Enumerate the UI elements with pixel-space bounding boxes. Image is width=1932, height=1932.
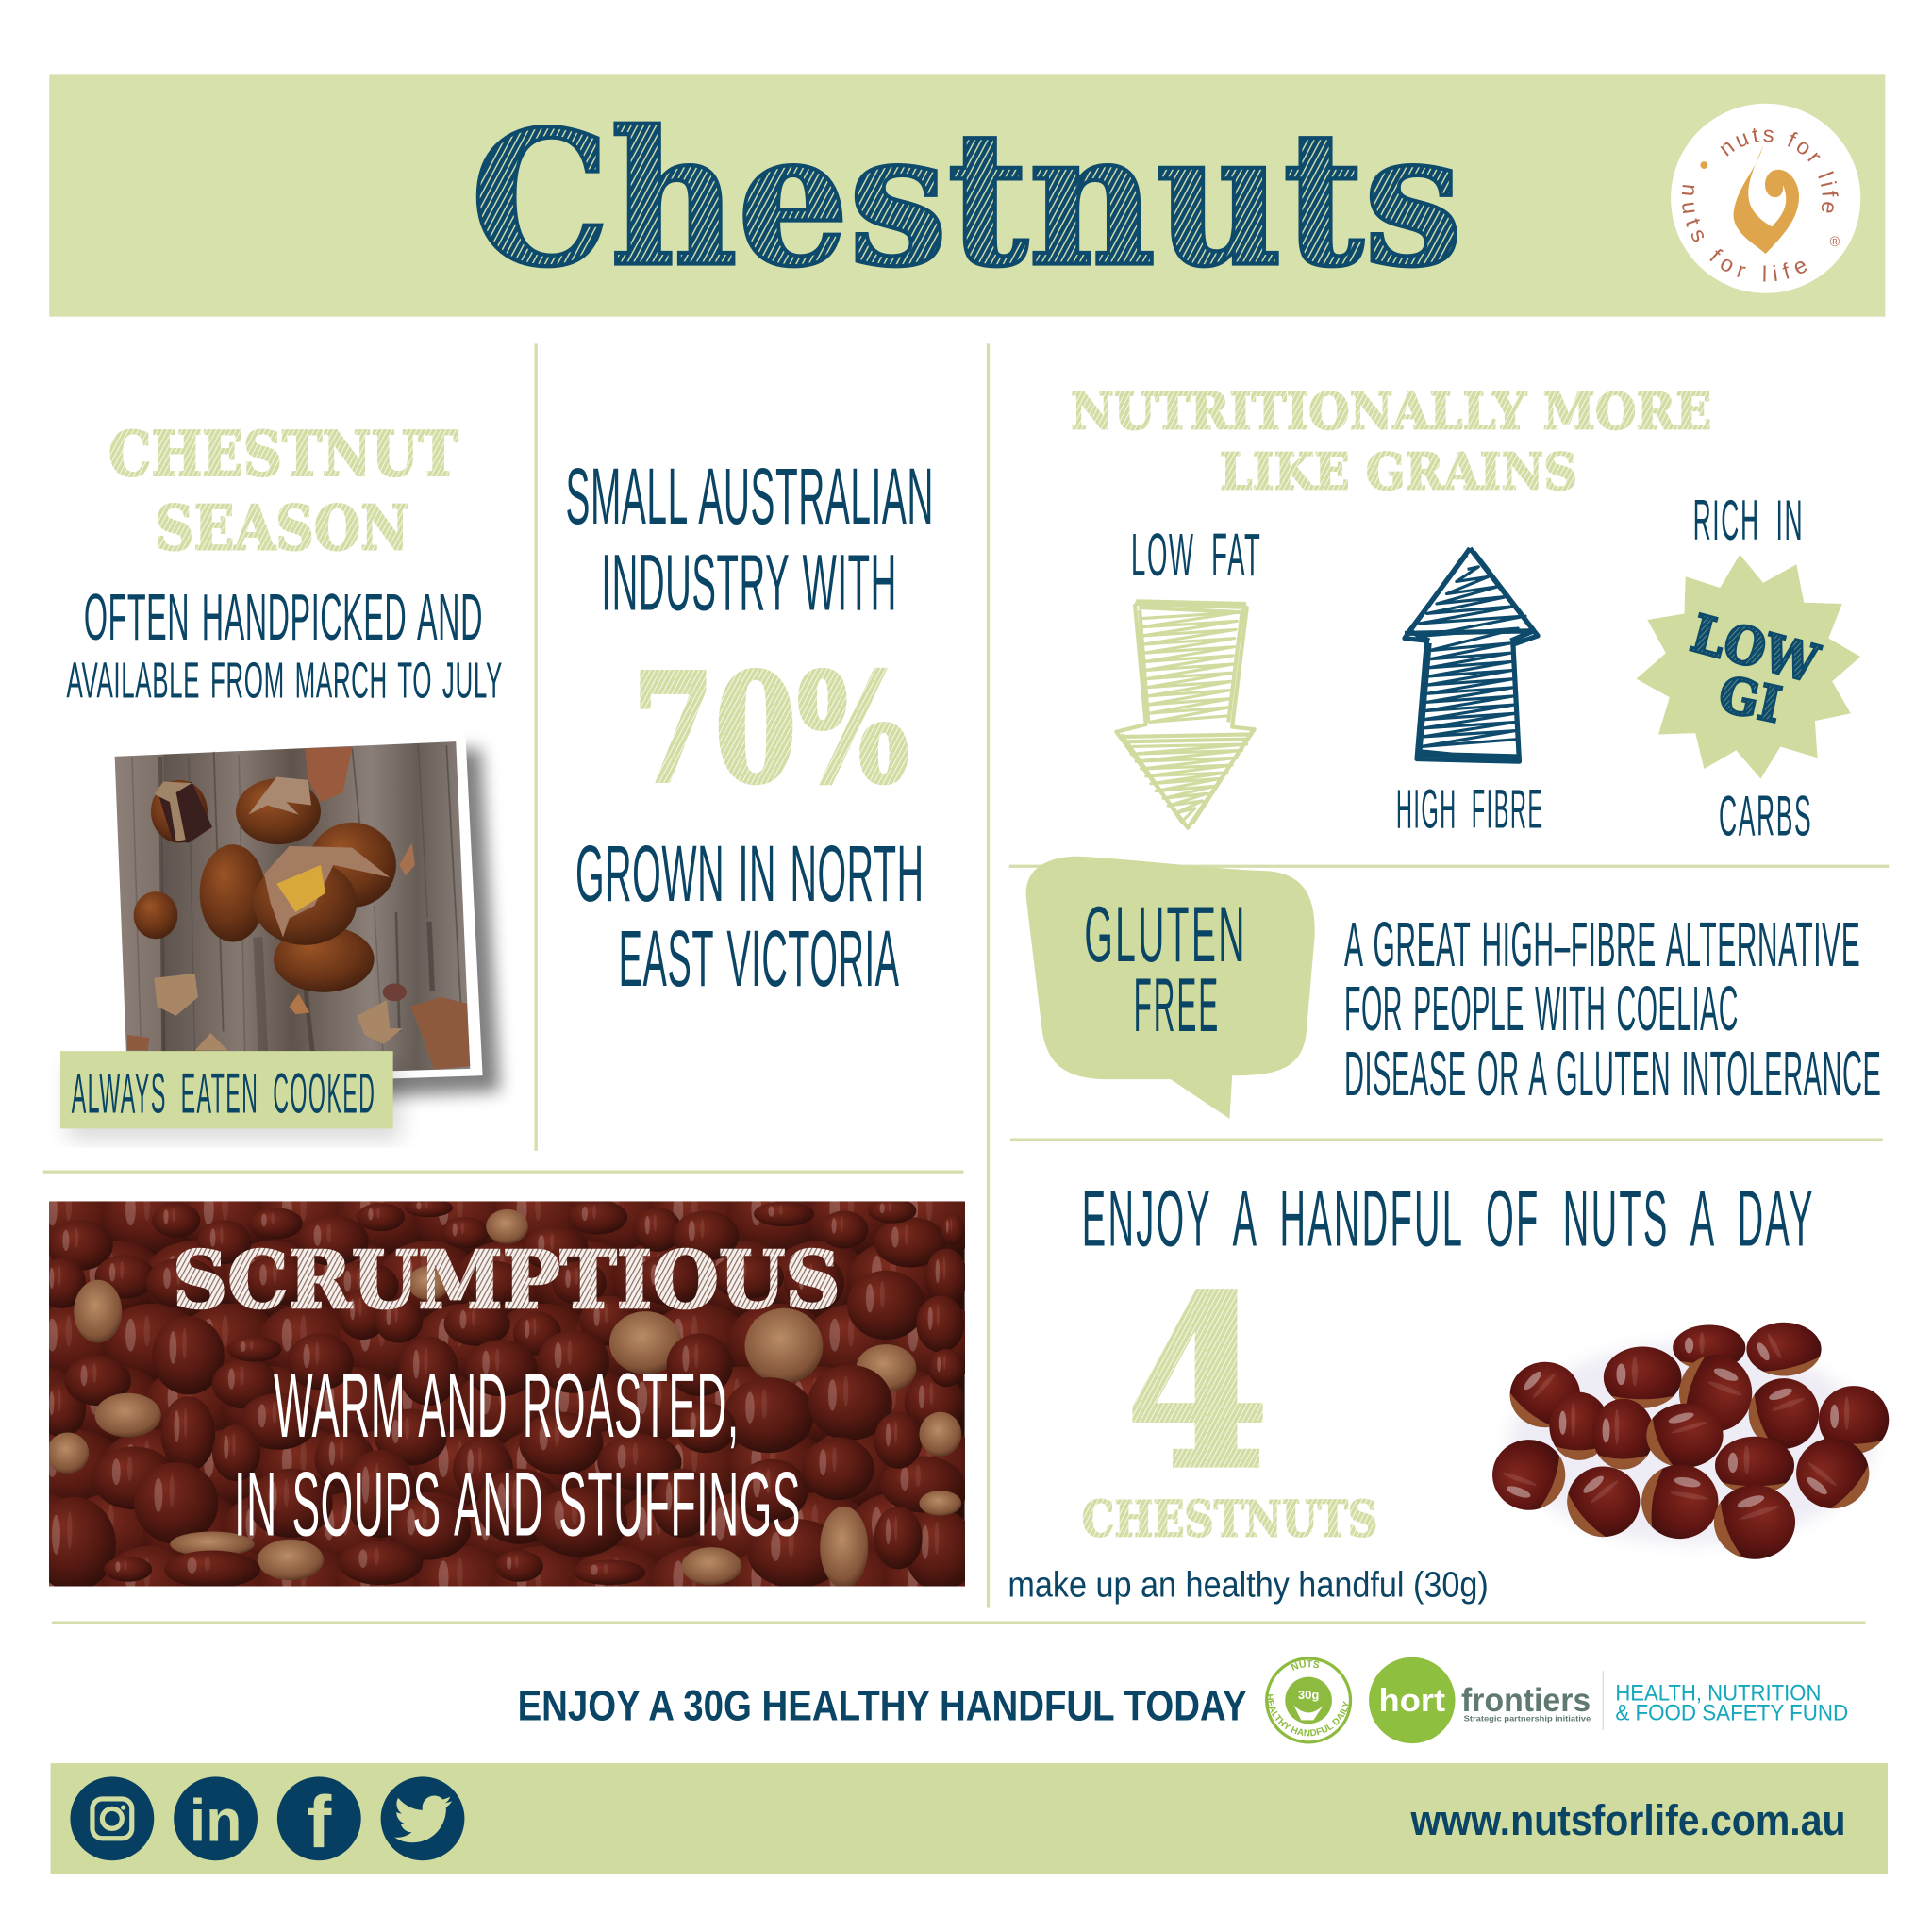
logo: health fund: HEALTH, NUTRITION [1615, 1680, 1821, 1706]
badge: low gi: GI [1714, 665, 1786, 735]
logo: hort frontiers [1369, 1657, 1591, 1743]
text: small australian industry: INDUSTRY WITH [601, 538, 897, 627]
stat: 70%: 70% [632, 640, 909, 817]
panel: nutrition: LOW FAT [1131, 521, 1261, 589]
speech bubble [1026, 857, 1315, 1119]
label: chestnuts: CHESTNUTS [1082, 1491, 1377, 1549]
logo: healthy handful badge: 30g [1298, 1688, 1319, 1702]
speech bubble: FREE [1134, 963, 1220, 1048]
panel: nutrition: HIGH FIBRE [1396, 779, 1544, 841]
heading: nutritionally more like grains: NUTRITIONALLY MORE [1071, 382, 1711, 441]
text: OFTEN HANDPICKED AND [84, 580, 483, 654]
text: healthy handful: make up an healthy handful (30g) [1008, 1566, 1489, 1606]
title: Chestnuts [471, 92, 1462, 308]
stat: 4: 4 [1126, 1245, 1269, 1521]
badge: low gi [1637, 555, 1860, 778]
panel: nutrition: CARBS [1719, 785, 1812, 848]
logo: health fund: & FOOD SAFETY FUND [1615, 1700, 1848, 1725]
icon: facebook [277, 1776, 361, 1863]
logo: healthy handful badge [1265, 1657, 1353, 1743]
panel: chestnut season: ALWAYS EATEN COOKED [72, 1061, 375, 1124]
logo: nuts for life [1671, 104, 1860, 293]
logo: healthy handful badge: HEALTHY HANDFUL DAILY [1268, 1694, 1349, 1736]
logo: healthy handful badge: NUTS [1291, 1660, 1319, 1671]
speech bubble: GLUTEN [1084, 890, 1247, 978]
heading: scrumptious: SCRUMPTIOUS [173, 1234, 841, 1326]
photo: roasted chestnuts on wood [99, 733, 500, 1107]
logo: nuts for life: ® [1830, 235, 1840, 250]
icon: down arrow [1116, 601, 1255, 828]
icon: twitter [381, 1776, 464, 1860]
heading: chestnut season [108, 419, 458, 565]
logo: hort frontiers: Strategic partnership initiative [1464, 1714, 1591, 1724]
panel: nutrition [1071, 382, 1860, 848]
panel: australian industry [566, 451, 934, 1003]
icon: up arrow [1405, 548, 1538, 761]
logo: hort frontiers: frontiers [1461, 1682, 1591, 1719]
logo: health fund [1603, 1671, 1848, 1730]
logo: hort frontiers: hort [1379, 1683, 1445, 1719]
text: small australian industry [566, 451, 934, 627]
heading: nutritionally more like grains: LIKE GRAINS [1220, 442, 1577, 502]
photo: chestnut pile [1482, 1315, 1889, 1570]
panel: scrumptious banner: IN SOUPS AND STUFFINGS [234, 1454, 801, 1555]
header band [49, 74, 1885, 317]
chestnut texture [49, 1202, 965, 1587]
panel: gluten free [1026, 857, 1881, 1119]
text: handpicked [67, 580, 503, 708]
text: serving ideas [234, 1356, 801, 1555]
badge: low gi: LOW [1685, 602, 1825, 694]
footer band [51, 1763, 1888, 1874]
icon: instagram [70, 1776, 154, 1860]
text: serving ideas: WARM AND ROASTED, [274, 1356, 740, 1457]
website url: www.nutsforlife.com.au [1410, 1796, 1846, 1844]
text: gluten free description [1344, 910, 1881, 1109]
text: grown in north east victoria [575, 828, 924, 1003]
label: always eaten cooked [60, 1051, 400, 1140]
panel: handful [1008, 1173, 1889, 1606]
icon: linkedin: in [190, 1788, 242, 1854]
heading: chestnut season: CHESTNUT [108, 419, 458, 491]
icon: linkedin [174, 1776, 258, 1860]
text: AVAILABLE FROM MARCH TO JULY [67, 653, 503, 708]
logo: nuts for life: nuts for life [1721, 128, 1839, 213]
text: SMALL AUSTRALIAN [566, 451, 934, 541]
icon: facebook: f [307, 1780, 332, 1863]
logo: nuts for life: nuts for life [1681, 185, 1807, 281]
text: GROWN IN NORTH [575, 828, 924, 918]
panel: scrumptious banner [0, 1177, 986, 1624]
heading: chestnut season: SEASON [156, 493, 409, 565]
heading: nutritionally more like grains [1071, 382, 1711, 502]
panel: australian industry: EAST VICTORIA [619, 913, 899, 1003]
panel: chestnut season [60, 419, 503, 1140]
call to action: ENJOY A 30G HEALTHY HANDFUL TODAY [518, 1681, 1247, 1729]
